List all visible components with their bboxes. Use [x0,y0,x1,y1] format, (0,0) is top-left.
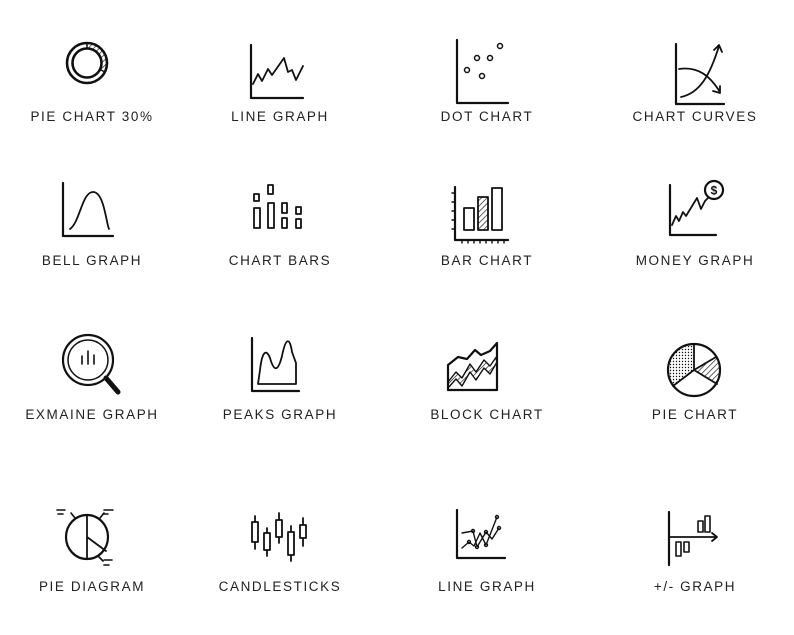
label: +/- graph: +/- GRAPH [654,579,736,594]
label: dot chart: DOT CHART [441,109,533,124]
icon: line graph [251,45,303,98]
icon: money graph: $ [711,184,718,198]
icon: examine graph [63,335,118,392]
icon: pie diagram [57,510,113,565]
label: chart curves: CHART CURVES [632,109,757,124]
label: peaks graph: PEAKS GRAPH [223,407,337,422]
icon: money graph [670,181,723,235]
label: line graph 2: LINE GRAPH [438,579,536,594]
label: chart bars: CHART BARS [229,253,331,268]
icon: bell graph [63,183,113,236]
icon: candlesticks [252,513,306,561]
icon: pie chart 30% [67,43,107,83]
label: candlesticks: CANDLESTICKS [219,579,341,594]
icon: bar chart [452,187,508,243]
label: block chart: BLOCK CHART [430,407,544,422]
label: bell graph: BELL GRAPH [42,253,142,268]
icon: pie chart [668,344,720,396]
icon: chart curves [676,44,724,104]
icon: dot chart [457,40,508,103]
label: pie diagram: PIE DIAGRAM [39,579,145,594]
label: pie chart 30%: PIE CHART 30% [30,109,154,124]
label: bar chart: BAR CHART [441,253,533,268]
label: line graph: LINE GRAPH [231,109,329,124]
icon: peaks graph [252,338,299,391]
icon: +/- graph [669,512,717,565]
label: pie chart: PIE CHART [652,407,738,422]
icon: line graph 2 [457,510,505,558]
icon: chart bars [254,185,301,228]
icon: block chart [448,343,497,390]
label: money graph: MONEY GRAPH [636,253,754,268]
label: examine graph: EXMAINE GRAPH [25,407,159,422]
